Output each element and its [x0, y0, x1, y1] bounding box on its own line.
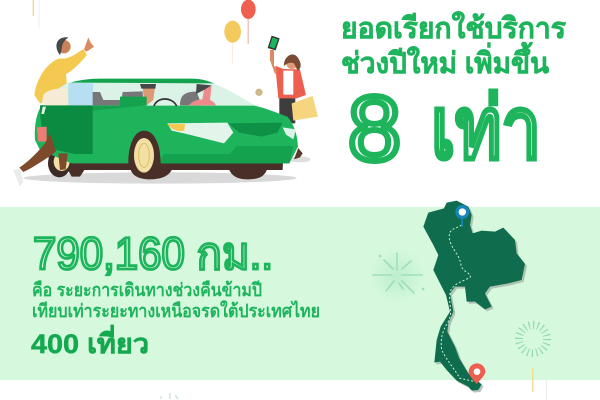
pin: end red: [469, 363, 485, 384]
firework: left: [369, 248, 425, 304]
heading: ช่วงปีใหม่ เพิ่มขึ้น: [341, 41, 549, 80]
decoration: top streamers: [32, 0, 40, 28]
description text: เทียบเท่าระยะทางเหนือจรดใต้ประเทศไทย: [32, 300, 320, 321]
windows: [43, 83, 255, 106]
headlights and grille: [167, 123, 233, 143]
description text: คือ ระยะการเดินทางช่วงคืนข้ามปี: [32, 280, 262, 300]
panel: distance band: [0, 207, 600, 380]
balloon: yellow: [224, 21, 241, 63]
heading: [341, 11, 566, 80]
decoration: lower firework fragment: [161, 393, 178, 399]
big stat: 8 times: [348, 78, 541, 180]
rear wheel: [48, 149, 71, 177]
dashed route: [441, 225, 475, 382]
description text: [32, 280, 320, 321]
map shadow: [425, 203, 527, 393]
car dark underbody: [47, 157, 283, 170]
heading: ยอดเรียกใช้บริการ: [341, 11, 566, 45]
map land: [423, 201, 525, 391]
man's legs: [19, 133, 56, 172]
person: woman with tablet and shopping bag: [255, 36, 318, 159]
front wheel: [128, 131, 172, 179]
shadow under car: [23, 172, 297, 184]
passengers: [143, 87, 155, 105]
big stat: 8 times: 8: [348, 78, 401, 180]
car body: [35, 105, 298, 163]
firework: right: [519, 325, 547, 353]
decoration: bottom streamers: [532, 368, 547, 400]
balloon: red: [241, 0, 256, 44]
stat: 400 trips: 400 เที่ยว: [31, 324, 149, 359]
open door: [40, 105, 93, 154]
illustration: car with passengers: [13, 36, 318, 187]
big stat: distance: 790,160 กม..: [33, 228, 273, 279]
roof: [68, 79, 215, 85]
map: Thailand route: [423, 201, 527, 393]
big stat: 8 times: เท่า: [431, 81, 541, 177]
person: man in yellow upper body: [34, 37, 94, 103]
pin: start blue: [455, 205, 469, 227]
